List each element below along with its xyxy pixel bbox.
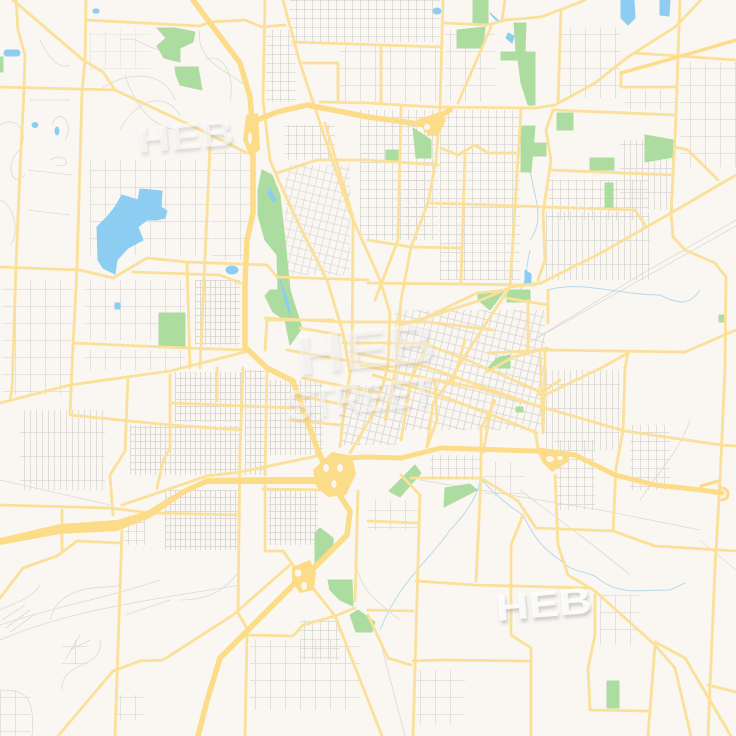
watermark: central STREET: STREET bbox=[284, 367, 436, 429]
rivers and streams bbox=[380, 170, 700, 630]
water bodies bbox=[4, 0, 670, 316]
interchange holes bbox=[248, 124, 563, 590]
watermark: HEB lower right: HEB bbox=[494, 580, 593, 629]
interchange: west junction bbox=[313, 452, 356, 497]
watermark: HEB upper left: HEB bbox=[135, 112, 235, 161]
west freeway bbox=[0, 477, 320, 545]
interchange: south junction bbox=[292, 560, 316, 593]
interchange: east junction bbox=[536, 447, 570, 472]
watermark: central HEB: HEB bbox=[293, 310, 438, 387]
interchange: north-west junction bbox=[243, 113, 260, 157]
interchange: north-east junction bbox=[416, 112, 446, 136]
